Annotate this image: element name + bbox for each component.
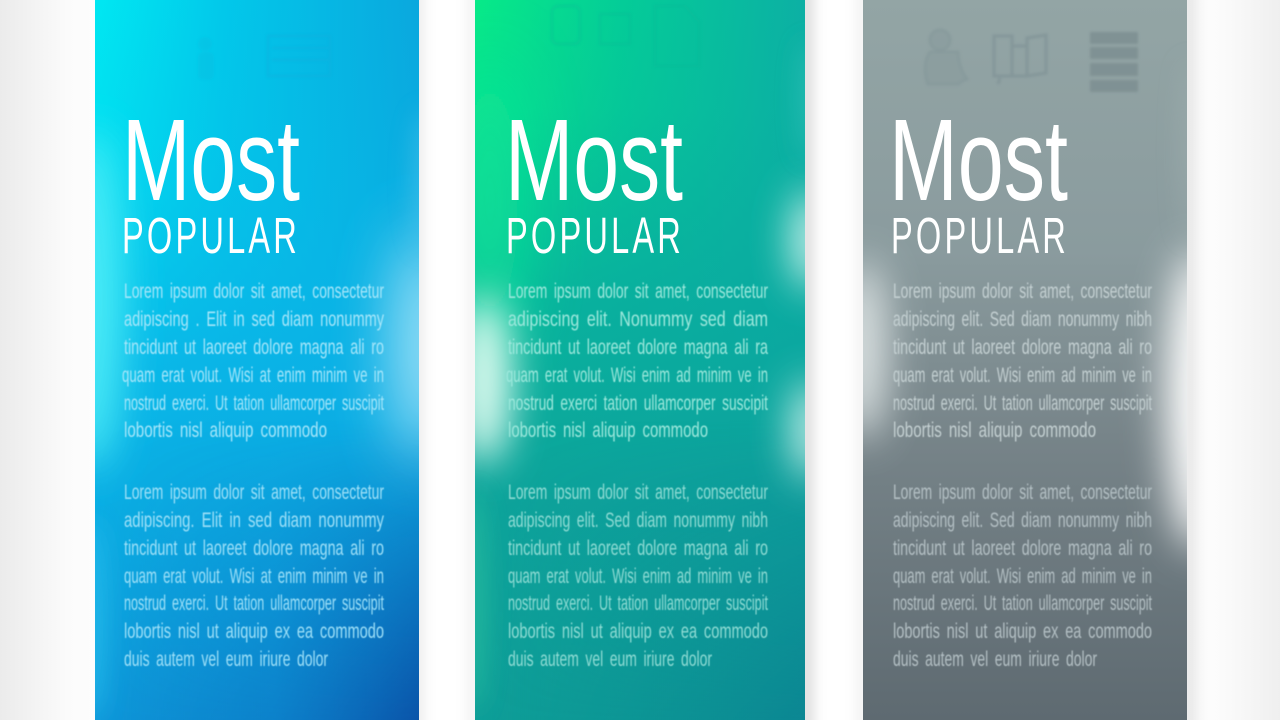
text block: first paragraph: Lorem ipsum dolor sit amet, consectetur	[508, 280, 768, 303]
text block: first paragraph: adipiscing elit. Sed diam nonummy nibh	[893, 308, 1152, 331]
text block: second paragraph: Lorem ipsum dolor sit amet, consectetur	[508, 481, 768, 504]
text block: first paragraph: Lorem ipsum dolor sit amet, consectetur	[124, 280, 384, 303]
text block: first paragraph: lobortis nisl aliquip commodo	[893, 419, 1096, 442]
text block: first paragraph: adipiscing elit. Nonummy sed diam	[508, 308, 768, 331]
text block: second paragraph: tincidunt ut laoreet dolore magna ali ro	[508, 537, 768, 560]
heading: Most: Most	[889, 95, 1068, 225]
text block: second paragraph: quam erat volut. Wisi enim ad minim ve in	[508, 565, 768, 588]
text block: second paragraph: nostrud exerci. Ut tation ullamcorper suscipit	[124, 592, 384, 615]
text block: first paragraph: lobortis nisl aliquip commodo	[124, 419, 327, 442]
heading: Most: Most	[122, 95, 300, 225]
text block: second paragraph: adipiscing elit. Sed diam nonummy nibh	[893, 509, 1152, 532]
text block: first paragraph: nostrud exerci. Ut tation ullamcorper suscipit	[124, 392, 384, 415]
text block: first paragraph: adipiscing . Elit in sed diam nonummy	[124, 308, 384, 331]
text block: second paragraph: adipiscing. Elit in sed diam nonummy	[124, 509, 384, 532]
text block: first paragraph: nostrud exerci tation ullamcorper suscipit	[508, 392, 768, 415]
text block: second paragraph	[124, 481, 384, 671]
text block: first paragraph	[506, 280, 768, 442]
panel: green banner	[475, 0, 805, 720]
text block: first paragraph: tincidunt ut laoreet dolore magna ali ro	[124, 336, 384, 359]
text block: second paragraph: lobortis nisl ut aliquip ex ea commodo	[124, 620, 384, 643]
heading: POPULAR: POPULAR	[122, 207, 300, 264]
text block: second paragraph: duis autem vel eum iriure dolor	[508, 648, 712, 671]
text block: first paragraph: quam erat volut. Wisi enim ad minim ve in	[506, 364, 768, 387]
text block: second paragraph: lobortis nisl ut aliquip ex ea commodo	[893, 620, 1152, 643]
text block: second paragraph: nostrud exerci. Ut tation ullamcorper suscipit	[508, 592, 768, 615]
panel: gray banner	[863, 0, 1187, 720]
text block: first paragraph: Lorem ipsum dolor sit amet, consectetur	[893, 280, 1152, 303]
text block: second paragraph: quam erat volut. Wisi at enim minim ve in	[124, 565, 384, 588]
text block: second paragraph: adipiscing elit. Sed diam nonummy nibh	[508, 509, 768, 532]
text block: second paragraph: Lorem ipsum dolor sit amet, consectetur	[124, 481, 384, 504]
heading: POPULAR: POPULAR	[891, 207, 1069, 264]
text block: second paragraph: tincidunt ut laoreet dolore magna ali ro	[893, 537, 1152, 560]
panel: blue banner	[95, 0, 419, 720]
gray background gradient	[863, 0, 1187, 720]
green background gradient	[475, 0, 805, 720]
icon: faint book	[268, 36, 330, 76]
text block: second paragraph	[508, 481, 768, 671]
text block: first paragraph: tincidunt ut laoreet dolore magna ali ra	[508, 336, 768, 359]
text block: first paragraph: lobortis nisl aliquip commodo	[508, 419, 708, 442]
icon: open book	[994, 35, 1046, 84]
text block: first paragraph	[893, 280, 1152, 442]
icon: stacked bars	[1090, 32, 1138, 92]
blue background gradient	[95, 0, 419, 720]
text block: second paragraph	[893, 481, 1152, 671]
text block: first paragraph	[122, 280, 384, 442]
text block: second paragraph: Lorem ipsum dolor sit amet, consectetur	[893, 481, 1152, 504]
text block: second paragraph: duis autem vel eum iriure dolor	[893, 648, 1097, 671]
text block: first paragraph: tincidunt ut laoreet dolore magna ali ro	[893, 336, 1152, 359]
text block: first paragraph: quam erat volut. Wisi at enim minim ve in	[122, 364, 384, 387]
text block: second paragraph: tincidunt ut laoreet dolore magna ali ro	[124, 537, 384, 560]
text block: second paragraph: duis autem vel eum iriure dolor	[124, 648, 328, 671]
icon: faint person	[198, 37, 214, 80]
icons: faint outlines	[552, 6, 699, 66]
heading: POPULAR: POPULAR	[506, 207, 684, 264]
heading: Most: Most	[505, 95, 683, 225]
text block: second paragraph: lobortis nisl ut aliquip ex ea commodo	[508, 620, 768, 643]
icon: person	[925, 30, 968, 84]
